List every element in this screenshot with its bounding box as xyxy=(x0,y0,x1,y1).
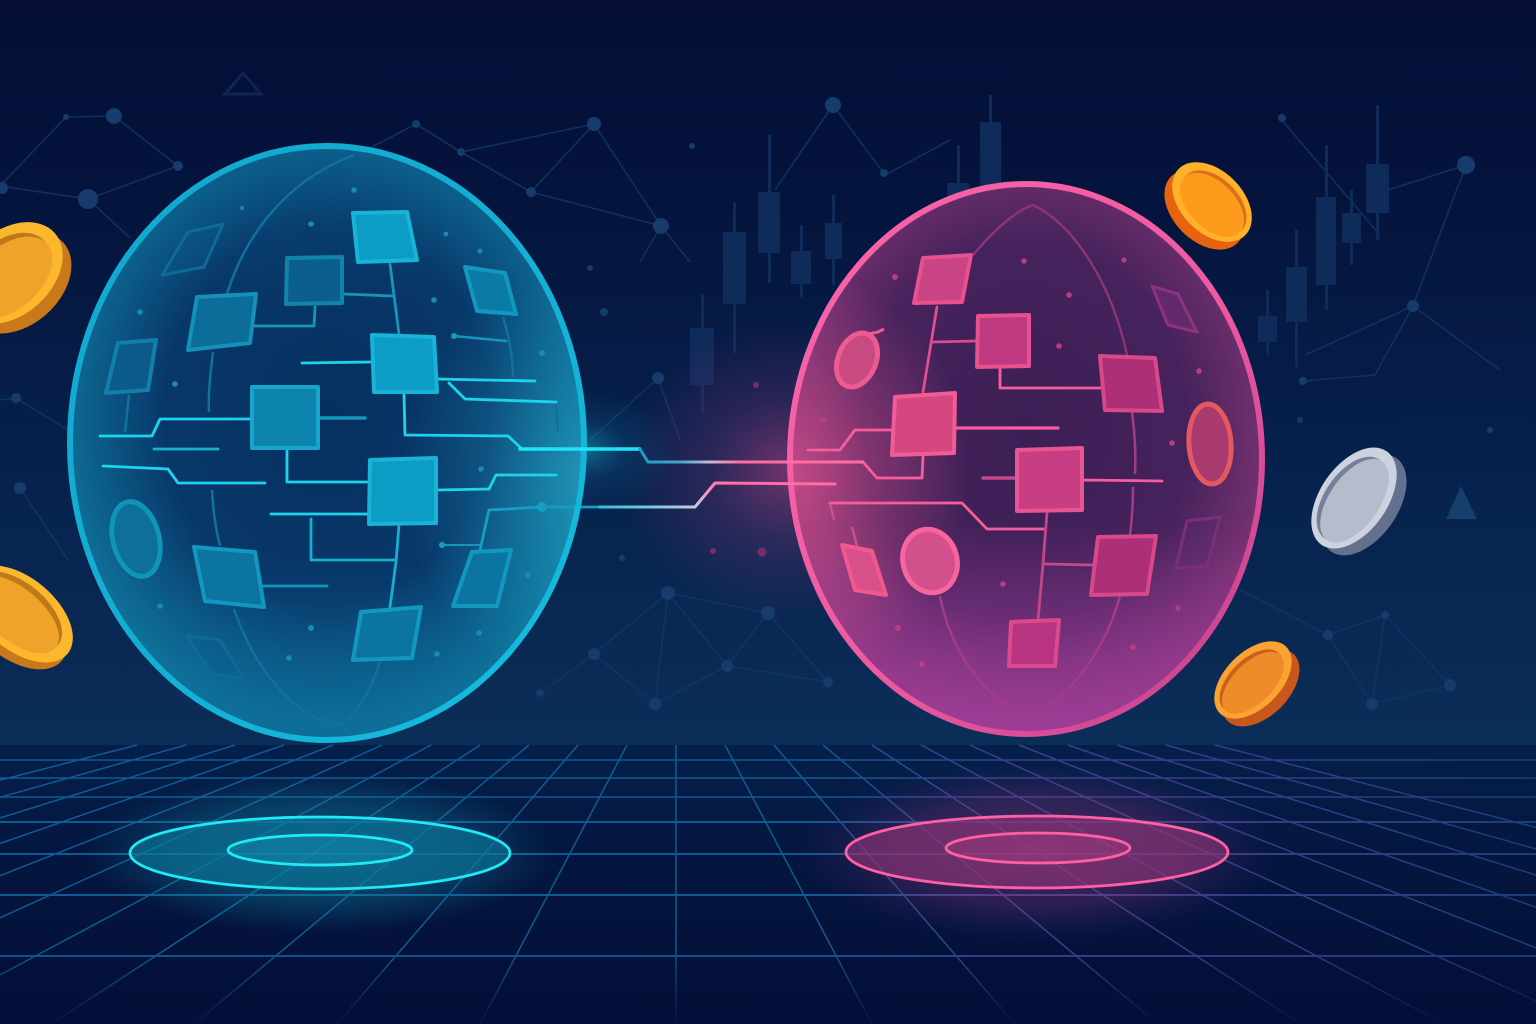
right sphere oval nodes xyxy=(829,327,1234,599)
floor grid xyxy=(0,745,1536,1024)
right sphere square nodes xyxy=(842,255,1162,666)
left sphere meridians xyxy=(125,155,558,725)
left sphere xyxy=(70,146,600,740)
left sphere dim nodes xyxy=(104,224,243,678)
coin top left xyxy=(0,202,91,354)
right sphere xyxy=(710,184,1262,734)
network constellation background xyxy=(0,105,1500,704)
right floor ring xyxy=(797,762,1277,942)
coin bottom right xyxy=(1200,627,1314,741)
left floor ring xyxy=(85,773,555,933)
right sphere traces xyxy=(808,307,1162,620)
triangle right xyxy=(1446,486,1477,519)
candlestick chart centre xyxy=(690,95,1001,413)
coin lower left xyxy=(0,547,91,688)
left sphere rim xyxy=(70,146,584,740)
left sphere dim traces xyxy=(254,264,600,586)
coin top right xyxy=(1149,147,1267,265)
candlestick chart right xyxy=(1258,105,1389,367)
right sphere rim xyxy=(790,184,1262,734)
left sphere trace dots xyxy=(439,333,547,548)
right sphere dots xyxy=(820,257,1202,667)
ambient glow between spheres xyxy=(495,320,960,620)
background nodes xyxy=(0,97,1493,710)
stray pink dots outside sphere xyxy=(710,382,766,556)
left sphere dots xyxy=(137,187,545,661)
right sphere dim nodes xyxy=(1152,286,1220,568)
coin silver xyxy=(1294,432,1424,571)
right sphere meridians xyxy=(830,205,1135,716)
left sphere square nodes xyxy=(188,212,516,660)
background xyxy=(0,0,1536,745)
connecting data lines between spheres xyxy=(520,449,863,507)
left sphere bright traces xyxy=(100,362,600,607)
triangle outline top left xyxy=(225,73,261,94)
